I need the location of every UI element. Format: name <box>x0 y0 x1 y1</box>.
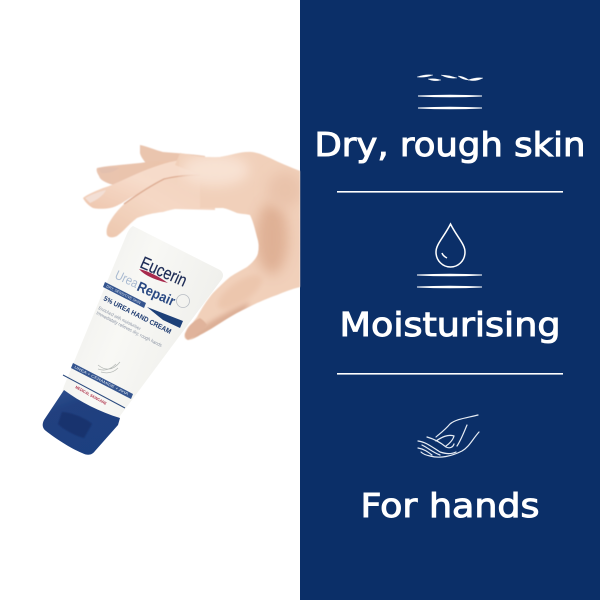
tube body <box>62 226 223 424</box>
hand <box>83 145 303 342</box>
brand logo: UREA + CERAMIDE + AHA <box>74 365 129 396</box>
ring finger nail <box>98 167 119 173</box>
heading: moisturising: Moisturising <box>340 305 560 344</box>
palm shading <box>181 154 303 342</box>
icon: hand <box>418 415 479 457</box>
ring finger <box>97 161 185 190</box>
top band <box>103 282 146 308</box>
thumb nail <box>185 318 207 340</box>
panel: navy benefits <box>300 0 600 600</box>
description: Enriched with moisturiser <box>97 305 142 332</box>
icon: water drop <box>417 224 482 288</box>
logo swoosh <box>139 269 168 283</box>
cap shadow <box>58 412 92 438</box>
brand logo <box>63 252 190 408</box>
little finger pressing the tube <box>107 174 215 237</box>
palm and thumb <box>175 152 300 340</box>
middle finger <box>140 145 205 172</box>
medical skincare label: MEDICAL SKINCARE <box>75 385 108 406</box>
tube cap <box>43 390 120 455</box>
product strap line: 5% UREA HAND CREAM <box>102 296 172 336</box>
divider <box>337 373 563 375</box>
product tube <box>43 226 223 455</box>
pack hand icon <box>98 362 120 373</box>
index finger nail <box>85 190 106 203</box>
brand logo: Eucerin <box>137 252 190 291</box>
heading: for hands: For hands <box>360 486 540 525</box>
thin band line <box>63 375 125 408</box>
ingredients band <box>71 363 133 399</box>
divider <box>337 191 563 193</box>
finger crease <box>124 175 202 204</box>
navy band <box>147 307 183 328</box>
brand logo: Immediately relieves dry, rough hands <box>95 310 163 349</box>
brand logo: DRY, SENSITIVE SKIN <box>106 284 141 305</box>
heading: dry rough skin: Dry, rough skin <box>314 125 586 164</box>
index finger <box>83 158 215 209</box>
icon: dry skin <box>417 75 483 109</box>
product line name: Urea <box>113 267 141 291</box>
brand logo: Repair <box>135 278 178 309</box>
repair badge <box>176 294 190 308</box>
